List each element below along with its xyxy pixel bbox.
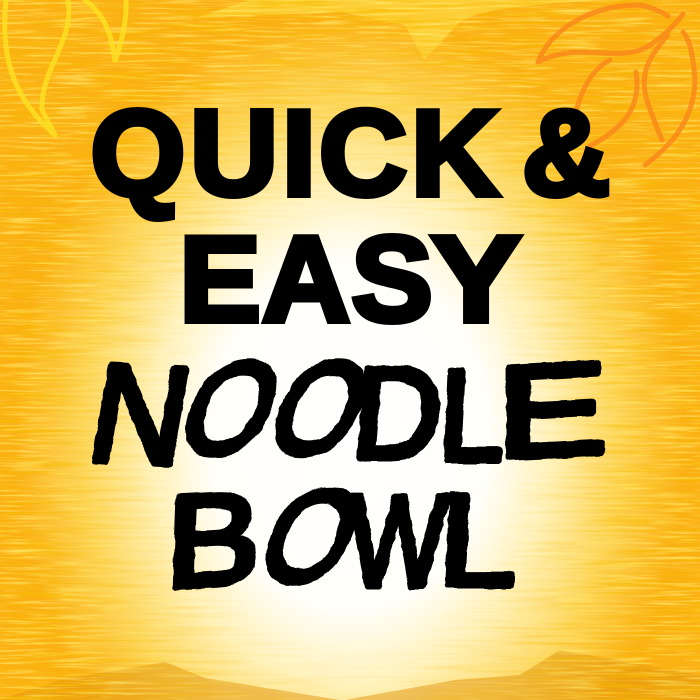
heading: QUICK &: Q (91, 85, 185, 221)
brush heading: BOWL: W (345, 468, 450, 614)
heading: EASY: E (179, 211, 261, 347)
brush heading: NOODLE (79, 334, 607, 495)
heading: QUICK &: K (411, 85, 499, 221)
heading: QUICK &: & (522, 85, 610, 221)
brush heading: BOWL: O (242, 464, 381, 609)
brush heading: NOODLE: O (251, 336, 390, 481)
heading: EASY (179, 211, 521, 347)
heading: QUICK & (91, 85, 610, 221)
heading: EASY: A (262, 211, 350, 347)
brush heading: NOODLE: E (497, 334, 607, 486)
brush heading: NOODLE: D (348, 340, 448, 486)
torn paper edge at bottom (0, 650, 700, 700)
brush heading: BOWL: B (164, 464, 263, 615)
torn paper edge at top (195, 0, 600, 60)
brush heading: NOODLE: L (436, 342, 509, 488)
brush heading: NOODLE: N (79, 334, 202, 495)
brush heading: BOWL (164, 464, 521, 615)
heading: QUICK &: I (282, 85, 316, 221)
brush heading: NOODLE: O (162, 336, 301, 481)
heading: QUICK &: C (319, 85, 407, 221)
heading: EASY: Y (431, 211, 521, 347)
heading: QUICK &: U (190, 85, 278, 221)
heading: EASY: S (351, 211, 433, 347)
leaf outlines: top right (538, 5, 695, 165)
leaf outlines: top left (5, 0, 126, 135)
brush heading: BOWL: L (436, 467, 521, 613)
